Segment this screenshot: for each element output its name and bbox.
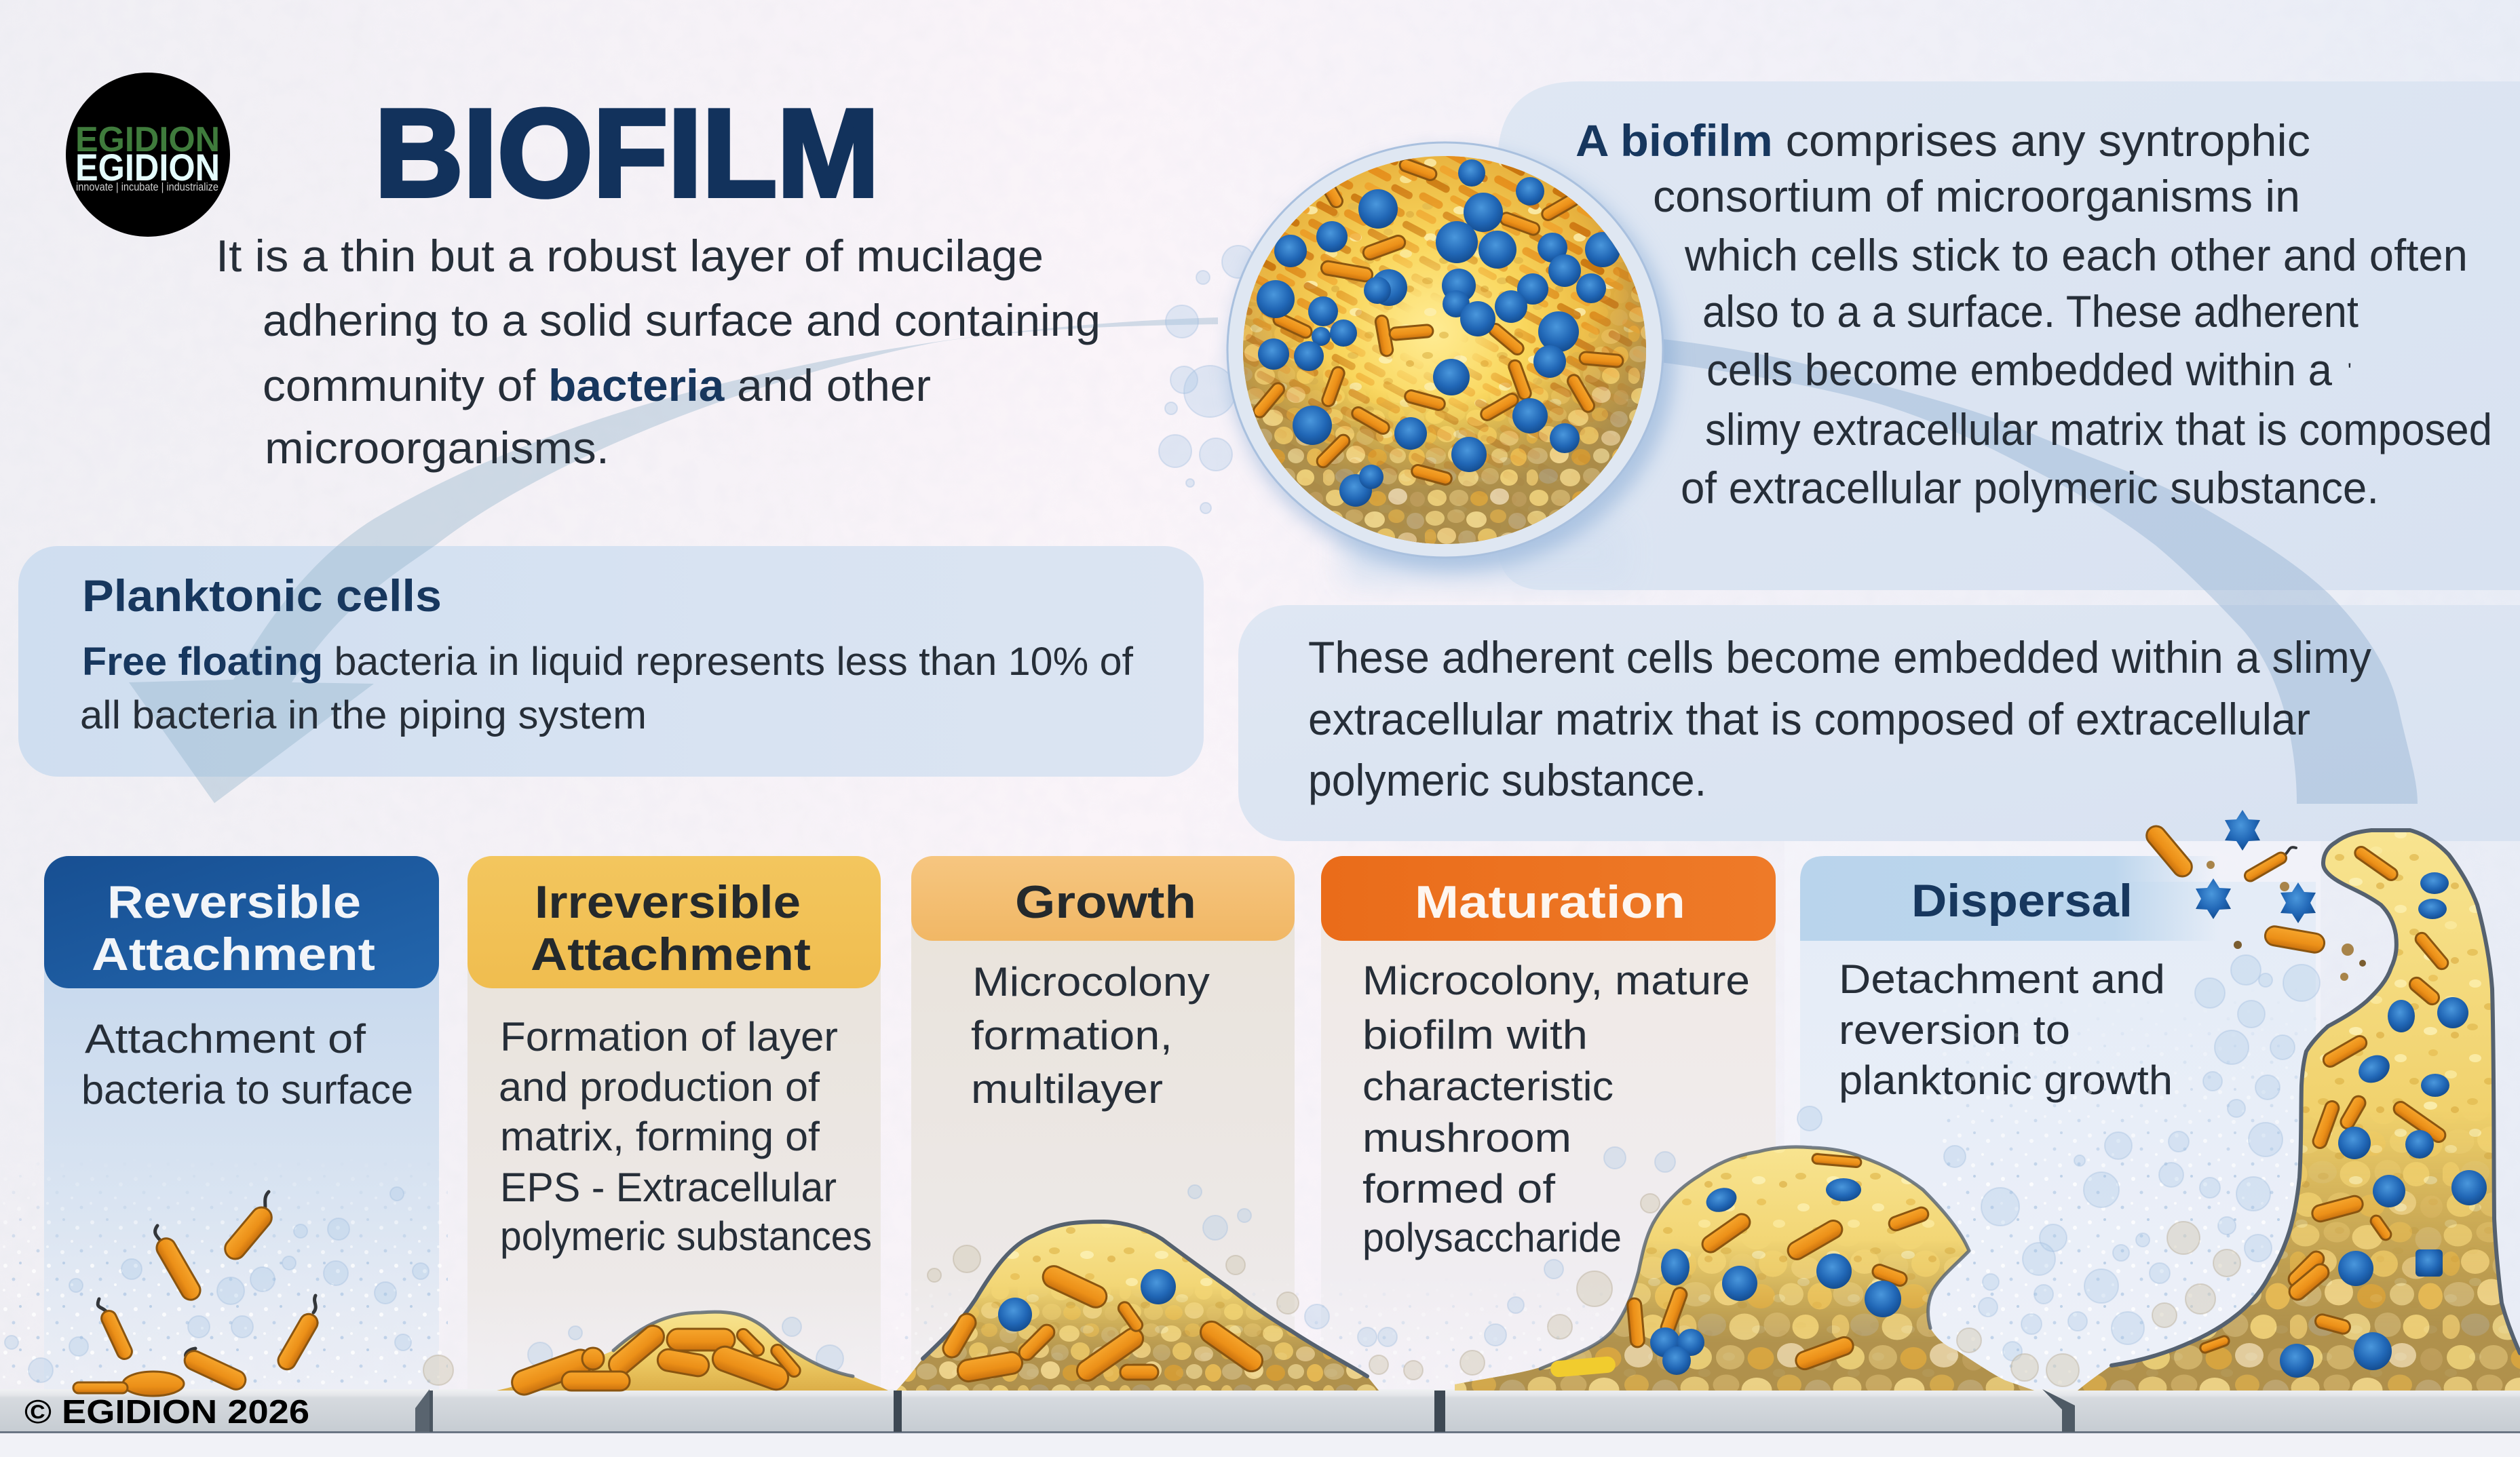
arrow: curved arrow to dispersal [1650, 338, 2418, 804]
header: maturation [1321, 856, 1776, 941]
header: growth [911, 856, 1295, 941]
illustration: maturation mushroom biofilm [1455, 1147, 2034, 1391]
copyright: © EGIDION 2026 [24, 1394, 309, 1431]
panel: reversible attachment [44, 856, 439, 1397]
panel: growth [911, 856, 1295, 1397]
body text: maturation: polysaccharide [1362, 1215, 1622, 1260]
header: irreversible attachment: Irreversible [535, 876, 801, 928]
bubbles beside circle [1159, 246, 1255, 513]
body text: maturation: Microcolony, mature [1362, 958, 1750, 1003]
logo: Egidion: EGIDION [75, 146, 220, 189]
body text: dispersal: reversion to [1839, 1007, 2070, 1053]
body text: maturation: biofilm with [1362, 1012, 1588, 1057]
text block: embedded cells: These adherent cells become embedded within a slimy [1308, 632, 2371, 682]
body text: growth: Microcolony [972, 959, 1210, 1005]
illustration: growth mound [896, 1222, 1379, 1391]
text block: biofilm definition: consortium of microorganisms in [1653, 171, 2300, 221]
body text: dispersal: Detachment and [1839, 956, 2165, 1002]
header: irreversible attachment [467, 856, 881, 988]
body text: maturation: formed of [1362, 1166, 1555, 1211]
body text: irreversible attachment: EPS - Extracellular [500, 1165, 837, 1210]
text block: biofilm definition: also to a a surface. These adherent [1702, 286, 2359, 336]
body text: growth [971, 959, 1210, 1112]
text block: biofilm definition [1576, 115, 2492, 513]
text block: biofilm definition: ' [2348, 360, 2352, 382]
title: BIOFILM [375, 83, 879, 222]
body text: growth: multilayer [971, 1066, 1163, 1112]
header: growth: Growth [1015, 876, 1196, 928]
text block: intro: It is a thin but a robust layer of mucilage [216, 231, 1044, 281]
body text: dispersal: planktonic growth [1839, 1057, 2173, 1103]
illustration: free bacteria on surface [73, 1192, 321, 1396]
surface: ground slabs [0, 1389, 2520, 1457]
text block: intro: community of bacteria and other [263, 360, 931, 410]
panel: embedded cells [1238, 605, 2520, 841]
header: irreversible attachment: Attachment [531, 929, 811, 980]
header: reversible attachment: Reversible [107, 876, 361, 928]
text block: planktonic cells [80, 570, 1134, 737]
illustration: magnified biofilm circle [1227, 142, 1675, 571]
body text: reversible attachment [81, 1016, 413, 1112]
header: dispersal [1800, 856, 2219, 941]
body text: irreversible attachment [499, 1014, 872, 1259]
text block: embedded cells: polymeric substance. [1308, 755, 1706, 805]
header: reversible attachment [44, 856, 439, 988]
text block: biofilm definition: which cells stick to each other and often [1684, 230, 2468, 280]
panel: irreversible attachment [467, 856, 881, 1397]
panel: planktonic cells [18, 546, 1204, 777]
text block: biofilm definition: A biofilm comprises any syntrophic [1576, 115, 2310, 166]
body text: irreversible attachment: matrix, forming of [500, 1114, 820, 1159]
arrow: curved arrow to planktonic cells [129, 317, 1218, 803]
body text: irreversible attachment: polymeric substances [500, 1213, 872, 1259]
text block: planktonic cells: Planktonic cells [82, 570, 442, 621]
body text: irreversible attachment: and production of [499, 1064, 820, 1110]
illustration: dispersed cells [2143, 810, 2366, 981]
body text: reversible attachment: Attachment of [85, 1016, 366, 1062]
body text: dispersal [1839, 956, 2173, 1103]
text block: biofilm definition: of extracellular polymeric substance. [1681, 463, 2379, 513]
header: reversible attachment: Attachment [92, 929, 375, 980]
logo: Egidion [66, 73, 230, 237]
text block: biofilm definition: cells become embedded within a [1706, 345, 2332, 395]
logo: Egidion: EGIDION [75, 120, 220, 159]
text block: intro: adhering to a solid surface and containing [263, 295, 1101, 345]
text block: intro [216, 231, 1101, 473]
body text: maturation [1362, 958, 1750, 1260]
logo: Egidion: innovate | incubate | industrialize [76, 180, 218, 193]
header: maturation: Maturation [1415, 876, 1685, 928]
text block: embedded cells: extracellular matrix that is composed of extracellular [1308, 694, 2310, 744]
panel: biofilm definition [1497, 81, 2520, 590]
illustration: dispersal biofilm tower [2078, 830, 2520, 1391]
body text: reversible attachment: bacteria to surface [81, 1067, 413, 1112]
body text: maturation: mushroom [1362, 1115, 1571, 1161]
body text: maturation: characteristic [1362, 1064, 1614, 1109]
text block: intro: microorganisms. [265, 423, 609, 473]
illustration: irreversible attachment mound [497, 1312, 888, 1398]
header: dispersal: Dispersal [1911, 875, 2133, 927]
text block: embedded cells [1308, 632, 2371, 805]
body text: growth: formation, [971, 1013, 1172, 1058]
bubbles: water column [0, 955, 2321, 1391]
panel: maturation [1321, 856, 1776, 1397]
text block: planktonic cells: all bacteria in the piping system [80, 693, 647, 737]
text block: planktonic cells: Free floating bacteria in liquid represents less than 10% of [82, 640, 1134, 684]
panel: dispersal [1784, 841, 2321, 1394]
body text: irreversible attachment: Formation of layer [500, 1014, 838, 1060]
